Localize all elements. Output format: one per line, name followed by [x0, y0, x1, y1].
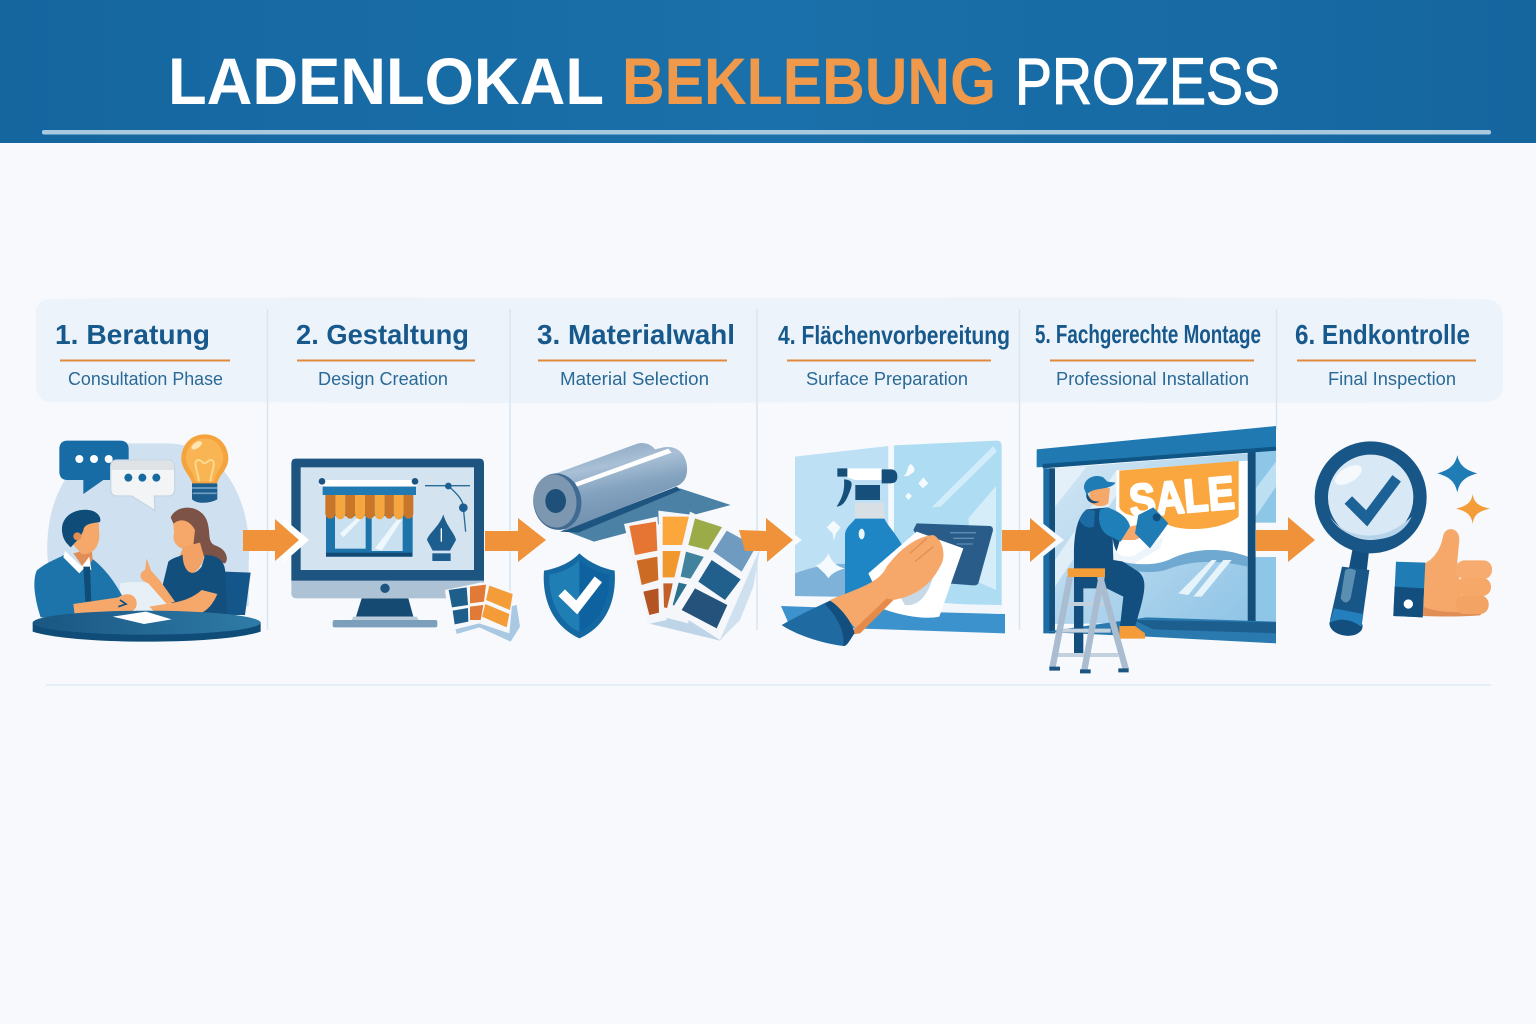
title: LADENLOKAL	[168, 44, 604, 118]
illustration: design monitor	[291, 459, 520, 642]
figure: worker on ladder	[1074, 476, 1168, 656]
arrow: step 3 to 4	[739, 518, 802, 562]
step 1 heading	[55, 319, 230, 389]
step 2 heading	[296, 319, 475, 389]
step 3 heading: Material Selection	[560, 369, 709, 389]
illustration: consultation meeting	[33, 434, 261, 642]
sale film	[1115, 461, 1248, 597]
step 5 heading	[1035, 319, 1261, 389]
shop window frame	[1037, 426, 1276, 643]
icon: shield with check	[544, 553, 615, 638]
illustration: professional installation	[1037, 426, 1276, 673]
step header band	[36, 298, 1503, 630]
table with paper	[33, 611, 261, 642]
step 2 heading: Design Creation	[318, 369, 448, 389]
illustration: surface preparation	[781, 441, 1005, 646]
step 4 heading: Surface Preparation	[806, 369, 968, 389]
illustration: final inspection	[1321, 448, 1492, 638]
step 3 heading: 3. Materialwahl	[537, 319, 735, 350]
figure: woman	[140, 508, 251, 615]
step 6 heading	[1295, 319, 1476, 389]
arrow: step 4 to 5	[1002, 518, 1064, 562]
icon: speech bubbles	[59, 441, 175, 511]
arrow: step 2 to 3	[485, 518, 546, 562]
monitor	[291, 459, 484, 627]
icon: colour swatches	[445, 582, 520, 642]
step 5 heading: 5. Fachgerechte Montage	[1035, 319, 1261, 349]
icon: light bulb	[181, 434, 228, 503]
icon: shop front	[319, 478, 418, 557]
arrow: step 1 to 2	[243, 518, 309, 563]
icon: colour fan deck	[624, 511, 762, 641]
icon: vinyl roll	[530, 443, 731, 542]
icon: spray bottle	[837, 468, 903, 608]
icon: squeegee	[913, 523, 993, 585]
icon: bezier and pen tool	[425, 483, 470, 561]
step 6 heading: Final Inspection	[1328, 369, 1456, 389]
title: BEKLEBUNG	[622, 44, 996, 118]
step 1 heading: Consultation Phase	[68, 369, 223, 389]
window pane	[781, 441, 1005, 633]
arrow: step 5 to 6	[1256, 517, 1315, 562]
step 4 heading: 4. Flächenvorbereitung	[778, 320, 1010, 350]
icon: sparkles	[816, 464, 928, 578]
step 3 heading	[537, 319, 735, 389]
step 4 heading	[778, 320, 1010, 389]
step 2 heading: 2. Gestaltung	[296, 319, 469, 350]
step 1 heading: 1. Beratung	[55, 319, 210, 350]
figure: man	[34, 510, 137, 617]
icon: sparkle stars	[1437, 455, 1490, 524]
figure: hand wiping with cloth	[782, 532, 963, 646]
header banner	[0, 0, 1536, 143]
step 5 heading: Professional Installation	[1056, 369, 1249, 389]
bottom divider line	[46, 684, 1491, 686]
icon: thumbs up	[1393, 529, 1492, 617]
step 6 heading: 6. Endkontrolle	[1295, 319, 1470, 350]
title: PROZESS	[1015, 44, 1280, 118]
icon: magnifying glass	[1321, 448, 1420, 638]
sale film: SALE	[1127, 466, 1236, 527]
icon: step ladder	[1049, 568, 1129, 673]
illustration: material selection	[530, 443, 762, 641]
